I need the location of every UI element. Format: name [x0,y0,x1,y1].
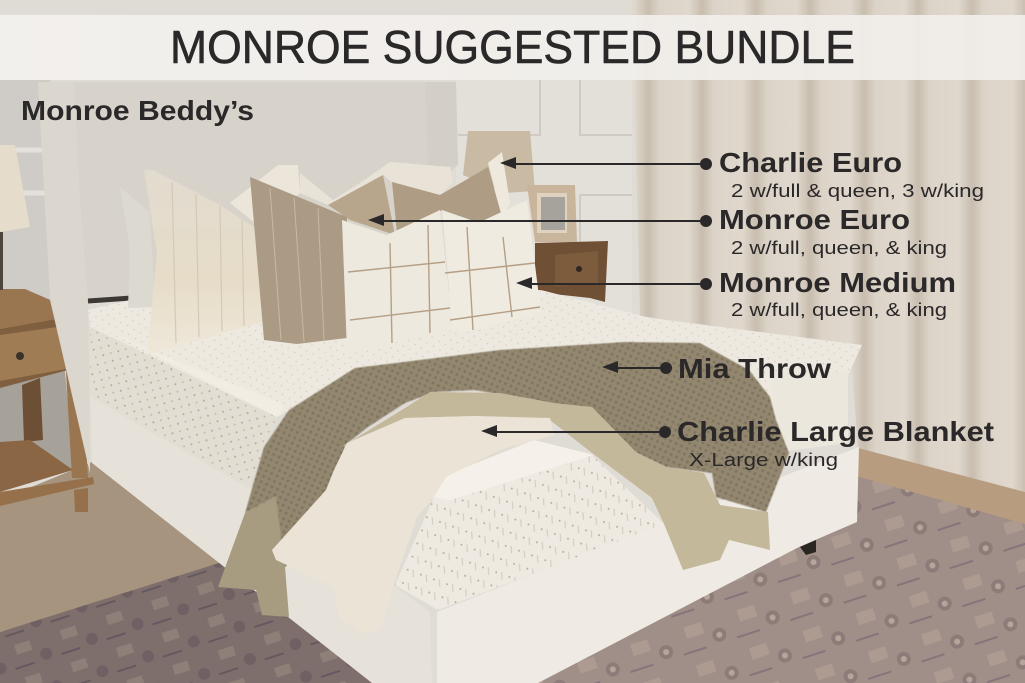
pillow: monroe euro tan center [328,175,395,235]
linen fringe [340,392,770,570]
label: mia throw: Mia Throw [678,353,831,384]
arrow: charlie euro [512,163,706,165]
label: charlie large blanket: Charlie Large Blanket [677,416,994,447]
left fringe [218,497,326,617]
curtains [632,0,1025,492]
mattress left side [90,327,277,488]
detail: monroe euro: 2 w/full, queen, & king [731,238,947,258]
arrow: charlie large blanket [493,431,665,433]
arrow: monroe medium [528,283,706,285]
callout: monroe euro [368,204,947,258]
subtitle: monroe beddy's: Monroe Beddy’s [21,95,254,126]
detail: monroe medium: 2 w/full, queen, & king [731,300,947,320]
label: monroe euro: Monroe Euro [719,204,910,235]
callout: mia throw [602,353,831,384]
left nightstand [0,289,94,512]
rug [0,476,1025,683]
mattress right side [770,372,848,452]
title band [0,15,1025,80]
pillow: monroe euro tan right [392,167,502,233]
pillow: monroe medium right [442,200,541,332]
callout: charlie euro [500,147,984,201]
pillows: back row white [230,152,510,227]
detail: charlie large blanket: X-Large w/king [689,450,838,470]
callout: charlie large blanket [481,416,994,470]
pillow: monroe medium left [342,210,453,352]
title: MONROE SUGGESTED BUNDLE [170,21,855,73]
arrow: monroe euro [380,220,706,222]
arrow: mia throw [614,367,666,369]
detail: charlie euro: 2 w/full & queen, 3 w/king [731,181,984,201]
bed top quilt [88,290,862,420]
headboard [38,82,458,473]
right nightstand [535,241,608,302]
wood floor [0,448,1025,632]
pillow: quilted sham [144,170,263,355]
mattress foot [395,440,664,610]
label: monroe medium: Monroe Medium [719,267,956,298]
mia throw [245,342,789,567]
pillow: monroe euro tan striped [250,177,347,344]
right lamp [463,131,535,193]
charlie large blanket [272,416,554,633]
callout: monroe medium [516,267,956,320]
label: charlie euro: Charlie Euro [719,147,902,178]
left lamp [0,145,30,290]
pillow: back left sham [120,187,155,308]
picture frame [527,185,577,242]
quilt fold [90,322,285,417]
bed base [90,395,859,683]
